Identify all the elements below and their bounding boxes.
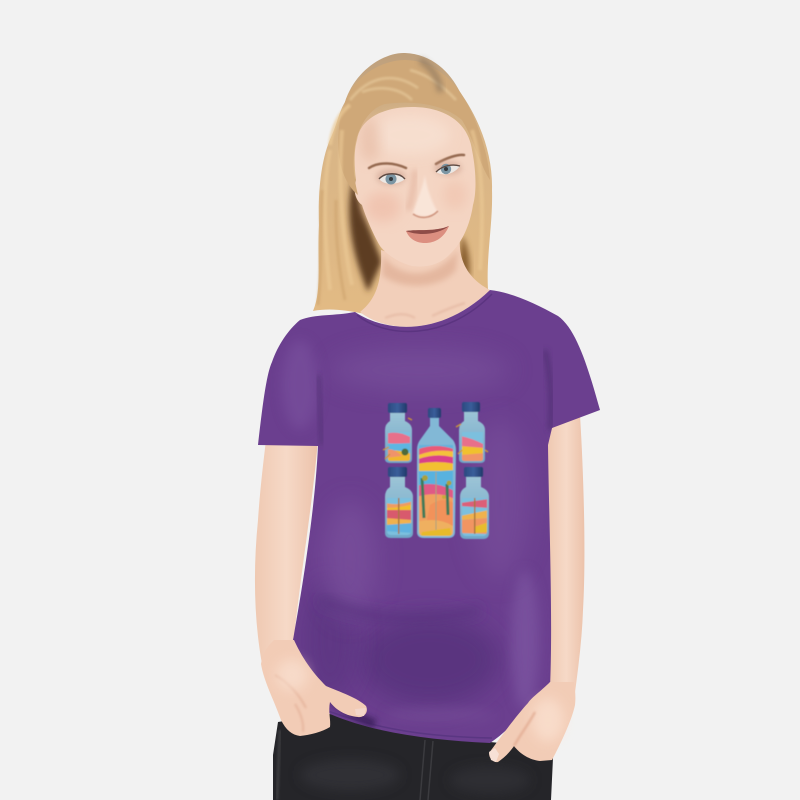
bottle: centre tall [416, 408, 457, 540]
right hand in pocket [489, 682, 575, 762]
right eye [434, 161, 462, 175]
right arm [548, 415, 584, 700]
lips [406, 226, 449, 243]
shirt shading and folds [282, 340, 551, 738]
bottle: top right [456, 402, 488, 464]
product photo: woman in purple T-shirt [255, 53, 600, 800]
nose [413, 211, 438, 217]
jeans [273, 714, 553, 800]
hair: front strands [318, 60, 490, 305]
left arm [255, 440, 318, 664]
collar [357, 294, 492, 332]
face [355, 107, 476, 267]
neck [360, 238, 490, 327]
print: six-panel desert water bottles [383, 402, 490, 540]
eyebrows [369, 155, 464, 168]
bottle: top left [383, 403, 413, 464]
T-shirt [258, 290, 600, 743]
left hand in pocket [261, 640, 367, 736]
left eye [376, 169, 406, 185]
bottle: bottom right [459, 467, 490, 540]
hair: back layer [313, 53, 492, 314]
bottle: bottom left [384, 467, 414, 539]
